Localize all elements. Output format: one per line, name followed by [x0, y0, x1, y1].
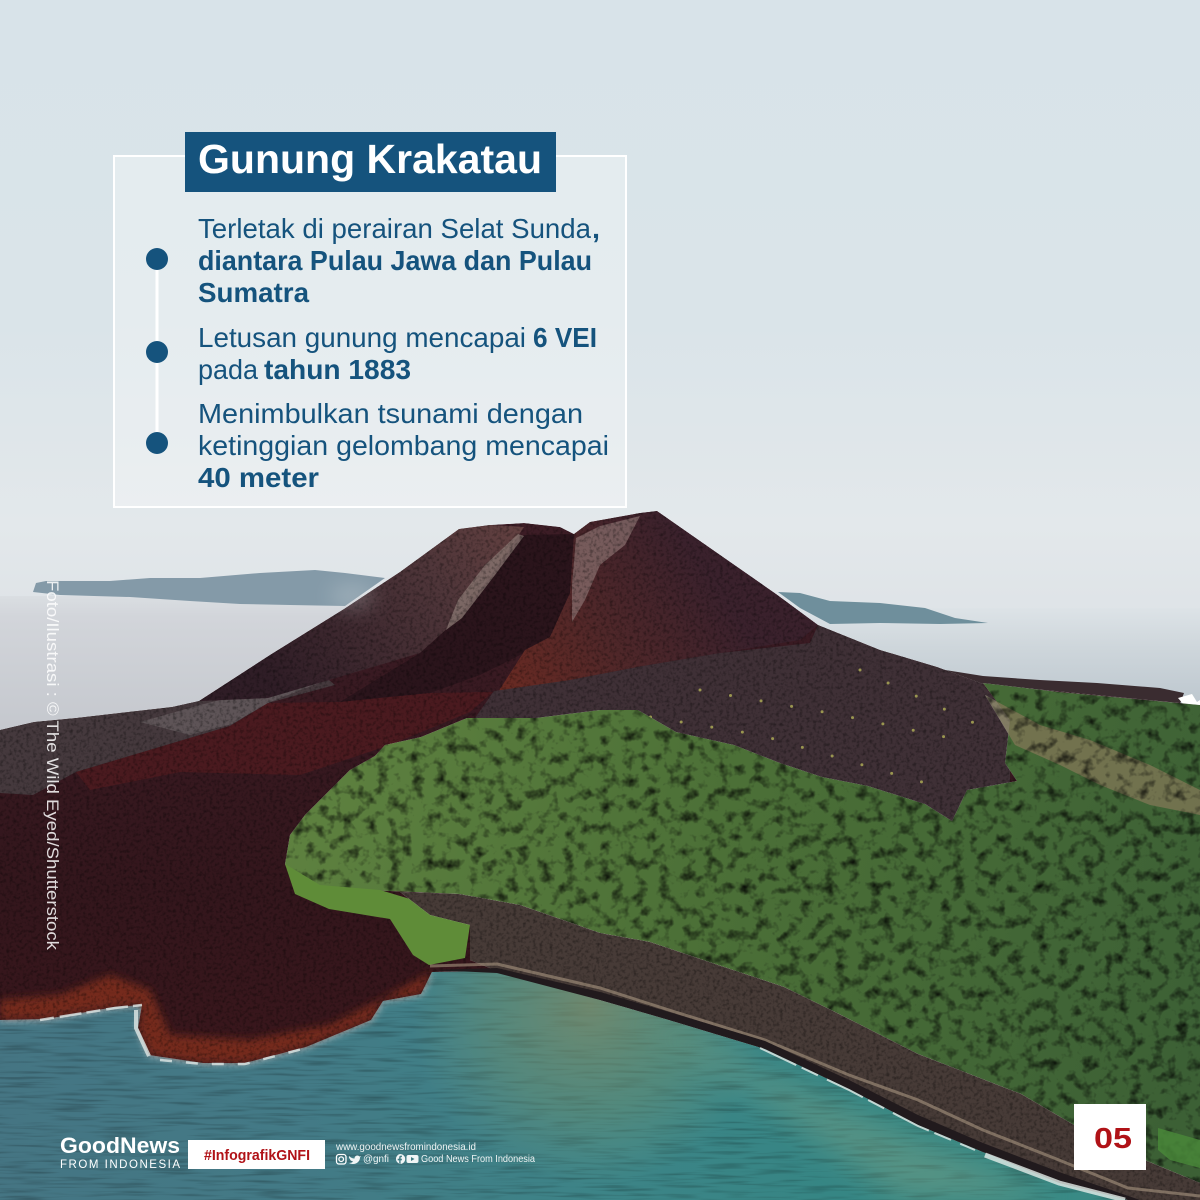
fact 1 text: Sumatra — [198, 277, 309, 308]
fact 1 text: , — [592, 213, 600, 244]
dark chute on the crater — [340, 534, 574, 702]
website and social handles — [335, 1141, 535, 1165]
foreground water — [0, 960, 1200, 1200]
website and social handles: Good News From Indonesia — [421, 1153, 535, 1165]
website and social handles: @gnfi — [363, 1153, 389, 1165]
page number: 05 — [1094, 1123, 1132, 1155]
bright green shore vegetation — [285, 864, 470, 965]
layered cliff — [400, 892, 1200, 1200]
fact 2 text: pada — [198, 354, 258, 385]
fact 3 text: 40 meter — [198, 462, 319, 493]
logo: GoodNews From Indonesia: GoodNews — [60, 1133, 180, 1158]
fact 1 text — [198, 213, 600, 308]
photo credit: Foto/Ilustrasi : © The Wild Eyed/Shutterstock — [43, 580, 62, 951]
volcano and lava land — [0, 511, 1200, 1200]
surf line — [760, 1048, 1125, 1200]
distant island right — [778, 592, 988, 624]
brown scrub patch — [985, 695, 1200, 815]
fact 1 text: diantara Pulau Jawa dan Pulau — [198, 245, 592, 276]
fact 2 text: Letusan gunung mencapai — [198, 322, 526, 353]
hashtag badge: #InfografikGNFI — [204, 1147, 310, 1164]
far lava strip right — [939, 669, 1184, 704]
background sky — [0, 0, 1200, 640]
surf along lava delta — [40, 1005, 306, 1064]
title box: Gunung Krakatau — [198, 136, 542, 182]
bullet 2 — [146, 341, 168, 363]
fact 3 text: Menimbulkan tsunami dengan — [198, 398, 583, 429]
grey rubble streak — [446, 534, 524, 630]
fact 2 text: tahun 1883 — [264, 354, 411, 385]
red lava delta edge — [0, 972, 432, 1063]
red lava band on the upper slope — [76, 692, 493, 790]
icon: facebook — [396, 1154, 405, 1164]
timeline connector — [156, 259, 158, 443]
website and social handles: www.goodnewsfromindonesia.id — [335, 1141, 476, 1153]
icon: instagram — [336, 1154, 346, 1164]
fact 3 text: ketinggian gelombang mencapai — [198, 430, 609, 461]
fact 3 text — [198, 398, 609, 493]
bullet 3 — [146, 432, 168, 454]
bright green vegetation by page number — [1158, 1128, 1200, 1168]
scrub specks on cinder slope — [620, 670, 1000, 790]
panel: facts — [114, 132, 626, 507]
forest — [285, 683, 1200, 1183]
grey cinder slope — [475, 625, 1010, 830]
bullet 1 — [146, 248, 168, 270]
pale crater streak — [572, 516, 640, 622]
icon: youtube — [406, 1155, 418, 1163]
sea foam far right — [1178, 694, 1200, 708]
grey ash flow — [0, 680, 335, 795]
logo: GoodNews From Indonesia — [60, 1133, 180, 1171]
hashtag badge — [188, 1140, 325, 1169]
dark beach — [432, 968, 1140, 1200]
far sea right — [780, 608, 1200, 708]
upper cone left slope — [199, 525, 524, 701]
icon: twitter — [349, 1155, 361, 1164]
distant island left — [33, 570, 385, 606]
volcanic smoke — [330, 584, 374, 608]
light rubble on ash flow — [140, 678, 332, 735]
pale ash layer on cliff — [430, 964, 1200, 1196]
logo: GoodNews From Indonesia: FROM INDONESIA — [60, 1159, 180, 1171]
fact 2 text — [198, 322, 597, 385]
page number — [1074, 1104, 1146, 1170]
right cone slope — [493, 511, 818, 700]
fact 2 text: 6 VEI — [533, 322, 597, 353]
fact 1 text: Terletak di perairan Selat Sunda — [198, 213, 591, 244]
far sea left — [0, 596, 420, 736]
